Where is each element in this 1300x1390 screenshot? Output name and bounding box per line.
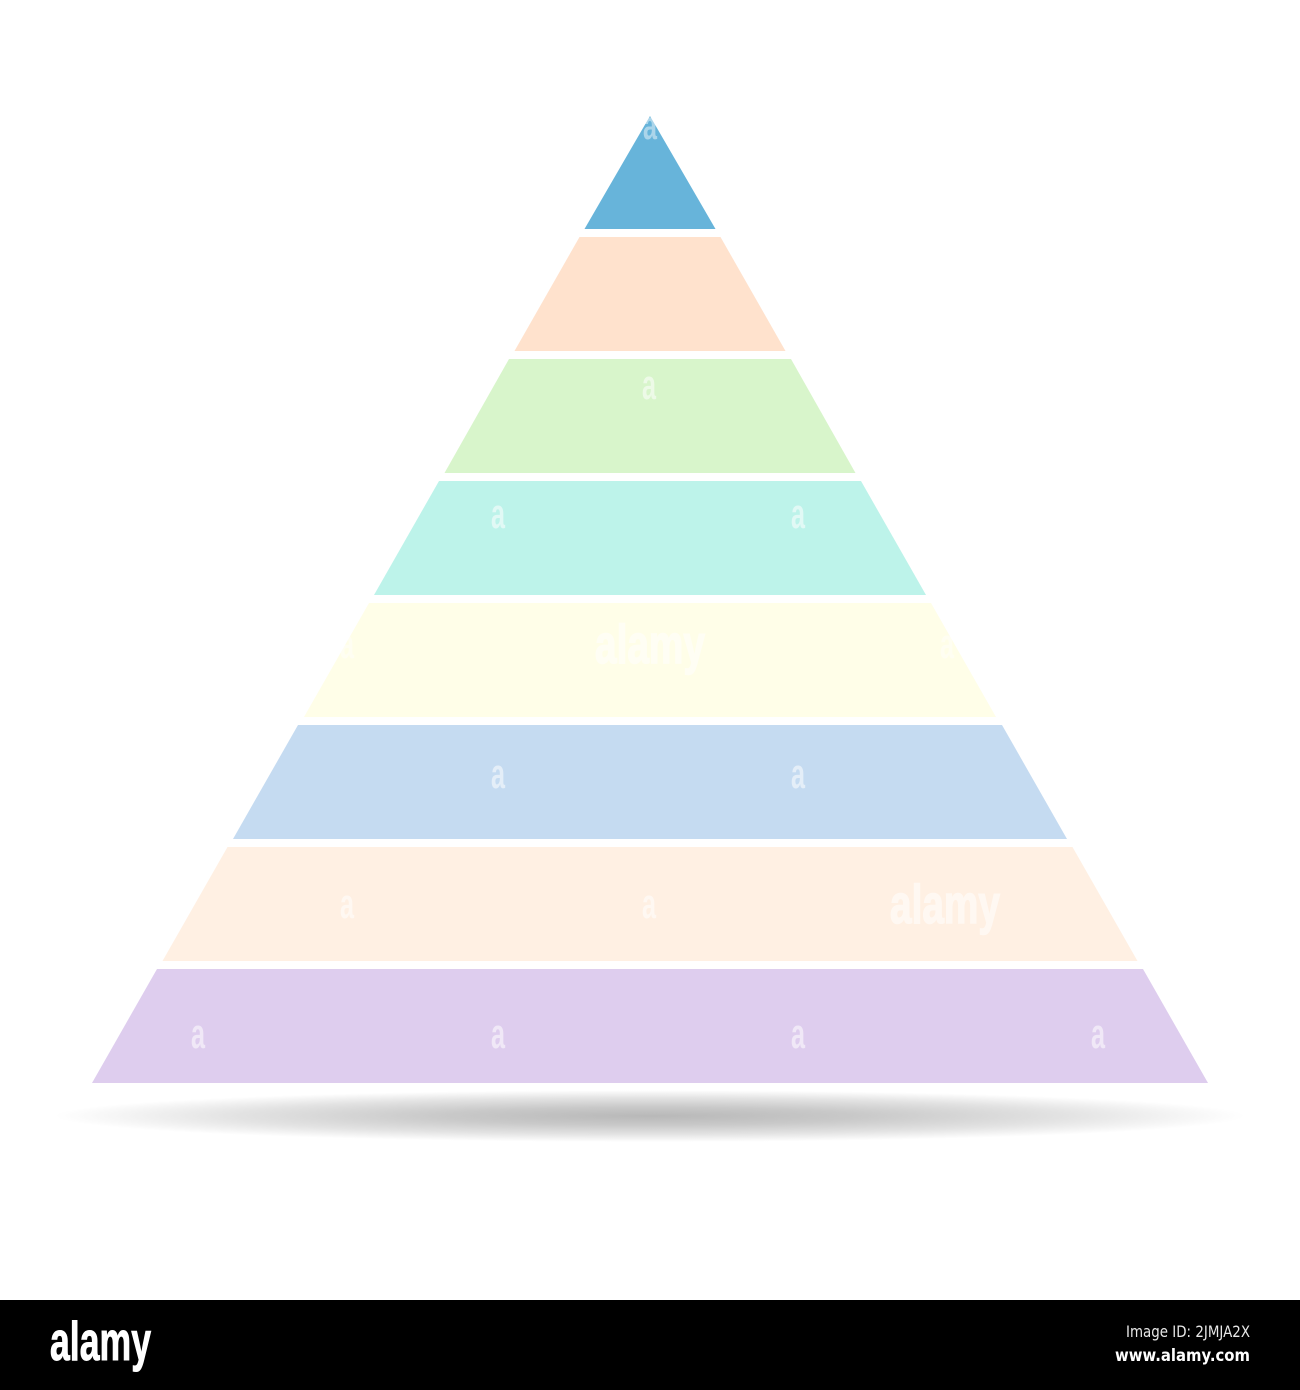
tier 2: peach — [514, 237, 786, 351]
tier 6: light blue — [233, 725, 1067, 839]
watermarks: a — [491, 750, 505, 797]
watermarks: a — [491, 1010, 505, 1057]
watermarks: a — [1091, 1010, 1105, 1057]
watermarks: a — [191, 1010, 205, 1057]
website: www.alamy.com — [1115, 1346, 1250, 1366]
tier 7: cream — [162, 847, 1138, 961]
pyramid — [92, 116, 1208, 1083]
tier 4: aqua — [374, 481, 926, 595]
watermarks: a — [643, 104, 657, 148]
image id: Image ID: 2JMJA2X — [1126, 1322, 1250, 1341]
tier 8: lavender — [92, 969, 1208, 1083]
watermarks: a — [642, 361, 656, 408]
watermarks: alamy — [595, 613, 705, 675]
watermarks: a — [791, 750, 805, 797]
watermarks: alamy — [890, 873, 1000, 935]
watermarks: a — [642, 880, 656, 927]
watermarks: a — [791, 490, 805, 537]
watermarks: a — [940, 620, 954, 667]
watermarks: a — [340, 880, 354, 927]
watermarks: a — [791, 1010, 805, 1057]
watermarks — [191, 104, 1105, 1057]
watermarks: a — [491, 490, 505, 537]
footer bar — [0, 1300, 1300, 1390]
tier 1: apex blue — [584, 116, 716, 229]
footer logo: alamy — [50, 1310, 151, 1372]
watermarks: a — [340, 620, 354, 667]
tier 5: pale yellow — [304, 603, 996, 717]
tier 3: light green — [444, 359, 856, 473]
pyramid shadow — [55, 1090, 1245, 1142]
